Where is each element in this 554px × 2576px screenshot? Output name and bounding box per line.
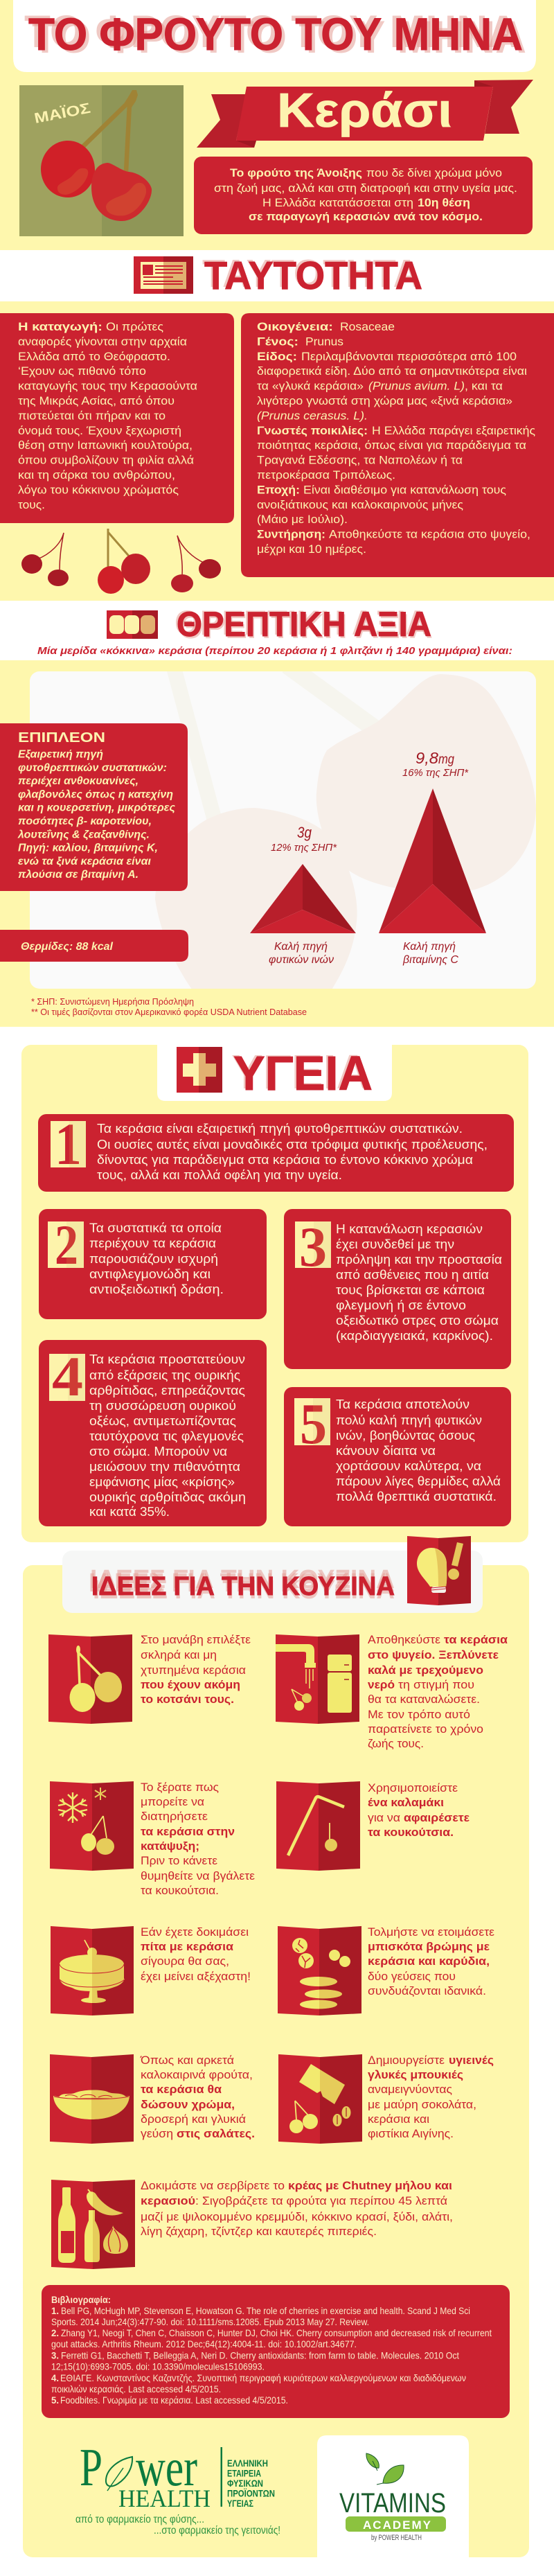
health card 5: ινών, βοηθώντας όσους: [336, 1429, 475, 1443]
icon: chocolate, cherries and pistachios: [278, 2054, 362, 2144]
tip 8: sweet bites: κεράσια και: [368, 2112, 429, 2126]
tip 4: pitting with a straw: για να: [368, 1811, 400, 1824]
tip 2: storing and washing: νερό: [368, 1678, 395, 1691]
chart: fibre triangle: 12% της ΣΗΠ*: [271, 843, 337, 854]
health card 4: Τα κεράσια προστατεύουν: [89, 1352, 245, 1366]
panel: origin text: Ελλάδα από το Θεόφραστο.: [18, 350, 170, 363]
panel: bibliography: Zhang Y1, Neogi T, Chen C, Chaisson C, Hunter DJ, Choi HK. Cherry consumption and decreased risk of recurrent: [61, 2327, 492, 2338]
chart: vitamin C triangle: βιταμίνης C: [402, 954, 458, 966]
tip 2: storing and washing: καλά με τρεχούμενο: [368, 1664, 483, 1677]
tip 7: salads: δώσουν χρώμα,: [141, 2098, 235, 2111]
health card 5: κάνουν δίαιτα να: [336, 1444, 436, 1458]
panel: additional nutrients: ΕΠΙΠΛΕΟΝ: [18, 730, 105, 746]
tip 7: salads: στις σαλάτες.: [177, 2127, 255, 2140]
panel: bibliography: 2.: [51, 2327, 59, 2338]
intro text box: Το φρούτο της Άνοιξης: [230, 166, 362, 179]
tip 8: sweet bites: υγιεινές: [449, 2054, 494, 2067]
tip 3: freezing: κατάψυξη;: [141, 1840, 199, 1853]
panel: botanical facts text: Γνωστές ποικιλίες:: [257, 424, 368, 437]
tip 8: sweet bites: Δημιουργείστε: [368, 2054, 445, 2067]
panel: origin text: όνομά τους. Έχουν ξεχωριστή: [18, 424, 181, 437]
icon: medical cross: [177, 1047, 222, 1093]
academy pill: [346, 2516, 446, 2532]
tip 9: chutney: κρέας με Chutney μήλου και: [288, 2179, 452, 2192]
company description: ΦΥΣΙΚΩΝ: [227, 2478, 263, 2489]
panel: origin text: αναφορές γίνονται στην αρχαία: [18, 335, 187, 348]
panel: calories: [0, 930, 188, 962]
health card 1: δίνοντας για παράδειγμα στα κεράσια το έντονο κόκκινο χρώμα: [97, 1153, 473, 1167]
health card 1: [38, 1111, 514, 1192]
icon: id card: [134, 256, 193, 294]
tip 7: salads: Όπως και αρκετά: [140, 2054, 234, 2067]
health card 3: [284, 1209, 511, 1369]
panel: calories: Θερμίδες: 88 kcal: [21, 941, 114, 953]
health card 5: χορτάσουν καλύτερα, να: [336, 1459, 481, 1473]
panel: botanical facts text: [241, 313, 554, 577]
tip 7: salads: γεύση: [141, 2127, 173, 2140]
panel: botanical facts text: διαφορετικά είδη. Δύο από τα σημαντικότερα είναι: [257, 364, 527, 378]
panel: origin text: λόγω του κόκκινου χρώματός: [18, 483, 179, 496]
academy pill: ACADEMY: [363, 2518, 431, 2532]
panel: additional nutrients: και η κουερσετίνη, μικρότερες: [18, 802, 176, 814]
panel: bibliography: Βιβλιογραφία:: [51, 2294, 111, 2305]
heading: health with icon: [177, 1045, 373, 1100]
panel: botanical facts text: τα «γλυκά κεράσια»: [257, 380, 364, 393]
health card 3: έχει συνδεθεί με την: [336, 1237, 454, 1251]
health card 5: πολλά θρεπτικά συστατικά.: [336, 1490, 497, 1503]
panel: additional nutrients: λουτεΐνης & ζεαξανθίνης.: [17, 829, 150, 840]
panel: bibliography: Bell PG, McHugh MP, Stevenson E, Howatson G. The role of cherries in exercise and health. Scand J Med Sci: [61, 2305, 470, 2316]
icon: bottles, onion and chili: [51, 2180, 135, 2269]
panel: bibliography: Ferretti G1, Bacchetti T, Belleggia A, Neri D. Cherry antioxidants: from farm to table. Molecules. 2010 Oct: [61, 2350, 459, 2361]
health card 4: τη συσσώρευση ουρικού: [89, 1399, 236, 1413]
tip 2: storing and washing: Αποθηκεύστε: [368, 1633, 440, 1646]
panel: bibliography: [42, 2285, 510, 2418]
tip 6: oat cookies: μπισκότα βρώμης με: [368, 1940, 490, 1953]
tip 9: chutney: [51, 2179, 453, 2269]
panel: bibliography: ΕΘΙΑΓΕ. Κωνσταντίνος Καζαντζής. Συνοπτική περιγραφή κυριότερων καλλιεργούμενων και διαδιδόμενων: [60, 2372, 466, 2383]
health card 4: οξέως, αντιμετωπίζοντας: [89, 1414, 236, 1428]
tip 2: storing and washing: θα τα καταναλώσετε.: [368, 1693, 480, 1706]
company description: ΕΤΑΙΡΕΙΑ: [227, 2468, 261, 2479]
value: fibre: 3g: [297, 824, 312, 841]
tip 3: freezing: διατηρήσετε: [141, 1810, 208, 1823]
health card 5: [284, 1387, 511, 1526]
tip 5: cherry pie: Εάν έχετε δοκιμάσει: [141, 1925, 249, 1939]
tip 6: oat cookies: συνδυάζονται ιδανικά.: [368, 1984, 486, 1997]
panel: botanical facts text: Είναι διαθέσιμο για κατανάλωση τους: [303, 483, 506, 496]
chart: fibre triangle: φυτικών ινών: [269, 954, 334, 966]
icon: light bulb with exclamation mark: [407, 1536, 471, 1605]
logo: Power Health: ...στο φαρμακείο της γειτονιάς!: [154, 2525, 280, 2537]
panel: origin text: καταγωγής τους την Κερασούντα: [18, 380, 197, 393]
panel: additional nutrients: ενώ τα ξινά κεράσια είναι: [18, 856, 151, 867]
background: nutrition yellow band: [0, 660, 554, 1027]
health card 3: τους βρίσκεται σε κάποια: [336, 1283, 485, 1297]
panel: origin text: πιστεύεται ότι πήραν και το: [18, 409, 166, 422]
fruit name: Κεράσι: [277, 83, 452, 137]
panel: bibliography: 3.: [51, 2350, 59, 2361]
logo: Power Health: από το φαρμακείο της φύσης...: [75, 2514, 204, 2525]
heading text: ΤΑΥΤΟΤΗΤΑ: [204, 254, 422, 298]
panel: botanical facts text: (Prunus cerasus. L).: [257, 409, 368, 422]
logo: Power Health: P: [80, 2437, 102, 2497]
health card 5: Τα κεράσια αποτελούν: [336, 1397, 470, 1411]
tip 2: storing and washing: στο ψυγείο. Ξεπλύνετε: [368, 1648, 499, 1661]
panel: botanical facts text: Συντήρηση:: [257, 528, 325, 541]
heading: nutritional value with icon: ΘΡΕΠΤΙΚΗ ΑΞΙΑ: [175, 603, 429, 642]
panel: origin text: τους.: [18, 498, 45, 511]
tip 5: cherry pie: πίτα με κεράσια: [141, 1940, 234, 1953]
panel: botanical facts text: Τραγανά Εδέσσης, τα Ναπολέων ή τα: [257, 454, 463, 467]
panel: botanical facts text: Γένος:: [257, 335, 298, 348]
panel: botanical facts text: Εποχή:: [257, 483, 300, 496]
logo: Vitamins Academy: VITAMINS: [339, 2488, 446, 2518]
panel: origin text: και τη σάρκα του ανθρώπου,: [18, 468, 175, 482]
heading: kitchen ideas: ΙΔΕΕΣ ΓΙΑ ΤΗΝ ΚΟΥΖΙΝΑ: [93, 1576, 395, 1605]
health card 3: (καρδιαγγειακά, καρκίνος).: [336, 1329, 493, 1343]
health card 3: από ασθένειες που η αιτία: [336, 1268, 489, 1282]
value: vitamin C: 9,8: [416, 749, 438, 767]
intro text box: [194, 157, 533, 234]
heading: nutritional value with icon: ΘΡΕΠΤΙΚΗ ΑΞΙΑ: [178, 607, 433, 646]
panel: health background: [21, 1045, 528, 1542]
tip 7: salads: τα κεράσια θα: [141, 2083, 222, 2096]
month label: ΜΑΪΟΣ: [33, 100, 91, 127]
intro text box: στη ζωή μας, αλλά και στη διατροφή και στην υγεία μας.: [214, 182, 517, 195]
tip 3: freezing: τα κουκούτσια.: [141, 1884, 219, 1897]
tip 6: oat cookies: κεράσια και καρύδια,: [368, 1955, 490, 1968]
number tile 1: 1: [55, 1111, 82, 1177]
panel: kitchen background: [23, 1565, 529, 2557]
company description: ΥΓΕΙΑΣ: [227, 2498, 253, 2509]
background: identity yellow band: [0, 301, 554, 601]
chart: fibre triangle: [250, 824, 356, 966]
ribbon with fruit name: [197, 80, 533, 148]
chart: fibre triangle: Καλή πηγή: [274, 941, 328, 953]
tip 1: choosing cherries: το κοτσάνι τους.: [141, 1693, 234, 1706]
health card 2: παρουσιάζουν ισχυρή: [89, 1252, 218, 1266]
logo: Power Health: HEALTH: [118, 2485, 211, 2512]
health card 4: μειώσουν την πιθανότητα: [89, 1460, 240, 1474]
tip 3: freezing: θυμηθείτε να βγάλετε: [141, 1869, 255, 1882]
health card 2: περιέχουν τα κεράσια: [89, 1237, 216, 1251]
value: vitamin C: mg: [438, 752, 454, 767]
panel: botanical facts text: ανοιξιάτικους και καλοκαιρινούς μήνες: [257, 498, 463, 511]
panel: bibliography: Foodbites. Γνωριμία με τα κεράσια. Last accessed 4/5/2015.: [60, 2394, 288, 2406]
tip 8: sweet bites: αναμειγνύοντας: [368, 2083, 452, 2096]
panel: botanical facts text: Είδος:: [257, 350, 297, 363]
panel: origin text: Η καταγωγή:: [18, 320, 102, 333]
health card 3: οξειδωτικό στρες στο σώμα: [336, 1314, 499, 1327]
tip 2: storing and washing: τη στιγμή που: [398, 1678, 474, 1691]
number tile 3: 3: [299, 1215, 327, 1278]
heading: identity with icon: ΤΑΥΤΟΤΗΤΑ: [202, 252, 420, 296]
panel: bibliography: 5.: [51, 2394, 59, 2406]
panel: botanical facts text: , και τα: [465, 380, 503, 393]
tip 2: storing and washing: παρατείνετε το χρόνο: [368, 1722, 483, 1736]
health card 1: Τα κεράσια είναι εξαιρετική πηγή φυτοθρεπτικών συστατικών.: [97, 1122, 463, 1136]
health card 4: αρθρίτιδας, επηρεάζοντας: [89, 1384, 245, 1397]
panel: botanical facts text: ποιότητας κεράσια, όπως είναι για παράδειγμα τα: [257, 439, 526, 452]
panel: bibliography: ποικιλιών κερασιάς. Last accessed 4/5/2015.: [51, 2383, 221, 2394]
tip 1: choosing cherries: [48, 1633, 251, 1724]
tip 1: choosing cherries: σκληρά και μη: [141, 1648, 217, 1661]
tip 4: pitting with a straw: Χρησιμοποιείστε: [368, 1781, 458, 1794]
health card 2: αντιοξειδωτική δράση.: [89, 1282, 224, 1296]
health card 5: πάρουν λίγες θερμίδες αλλά: [336, 1474, 501, 1488]
tip 3: freezing: μπορείτε να: [141, 1795, 204, 1808]
tip 3: freezing: Το ξέρατε πως: [141, 1781, 219, 1794]
tip 5: cherry pie: [51, 1925, 251, 2015]
panel: origin text: [0, 313, 234, 523]
chart: vitamin C triangle: 16% της ΣΗΠ*: [402, 768, 469, 779]
panel: additional nutrients: Πηγή: καλίου, βιταμίνης Κ,: [18, 843, 158, 854]
icon: tap and fridge: [276, 1634, 359, 1724]
panel: additional nutrients: [0, 723, 188, 891]
health card 2: Τα συστατικά τα οποία: [89, 1221, 222, 1235]
health card 4: από εξάρσεις της ουρικής: [89, 1368, 240, 1382]
heading: kitchen ideas: [62, 1551, 483, 1613]
tip 7: salads: [50, 2054, 255, 2144]
chart: vitamin C triangle: [379, 749, 486, 966]
tip 8: sweet bites: [278, 2054, 494, 2144]
panel: botanical facts text: Prunus: [305, 335, 343, 348]
footnotes: * ΣΗΠ: Συνιστώμενη Ημερήσια Πρόσληψη: [31, 997, 194, 1007]
heading text: ΘΡΕΠΤΙΚΗ ΑΞΙΑ: [177, 605, 431, 644]
tip 3: freezing: τα κεράσια στην: [141, 1825, 235, 1838]
health card 4: εμφάνισης μίας «κρίσης»: [89, 1475, 235, 1489]
tip 9: chutney: Δοκιμάστε να σερβίρετε το: [141, 2179, 285, 2192]
panel: additional nutrients: περιέχει ανθοκυανίνες,: [18, 775, 138, 787]
background: top yellow band: [0, 0, 554, 250]
health card 4: ταυτόχρονα τις φλεγμονές: [89, 1429, 244, 1443]
panel: additional nutrients: φλαβονόλες όπως η κατεχίνη: [18, 788, 173, 800]
health card 1: Οι ουσίες αυτές είναι μοναδικές στα τρόφιμα φυτικής προέλευσης,: [97, 1138, 488, 1152]
icon: open book: [107, 610, 158, 639]
icon: cherries: [48, 1634, 132, 1724]
icon: straw and cherry: [276, 1781, 360, 1871]
panel: botanical facts text: Περιλαμβάνονται περισσότερα από 100: [301, 350, 517, 363]
health card 3: πρόληψη και την προστασία: [336, 1253, 502, 1267]
panel: bibliography: gout attacks. Arthritis Rheum. 2012 Dec;64(12):4004-11. doi: 10.1002/art.34677.: [51, 2338, 357, 2349]
tip 4: pitting with a straw: ένα καλαμάκι: [368, 1796, 444, 1809]
panel: botanical facts text: (Prunus avium. L): [368, 380, 465, 393]
tip 7: salads: δροσερή και γλυκιά: [141, 2112, 246, 2126]
icon: salad bowl: [50, 2054, 134, 2144]
tip 8: sweet bites: γλυκές μπουκιές: [368, 2068, 463, 2081]
heading: health with icon: ΥΓΕΙΑ: [231, 1045, 370, 1099]
panel: additional nutrients: ποσότητες β- καροτενίου,: [18, 815, 152, 827]
heading: kitchen ideas: ΙΔΕΕΣ ΓΙΑ ΤΗΝ ΚΟΥΖΙΝΑ: [90, 1565, 395, 1594]
icon: leaves: [366, 2453, 404, 2485]
tip 1: choosing cherries: που έχουν ακόμη: [141, 1678, 240, 1691]
intro text box: Η Ελλάδα κατατάσσεται στη: [262, 196, 413, 209]
tip 6: oat cookies: [278, 1925, 494, 2015]
tip 4: pitting with a straw: τα κουκούτσια.: [368, 1826, 454, 1839]
tip 1: choosing cherries: χτυπημένα κεράσια: [141, 1664, 246, 1677]
panel: bibliography: Sports. 2014 Jun;24(3):477-90. doi: 10.1111/sms.12085. Epub 2013 May 27. Review.: [51, 2316, 369, 2327]
panel: origin text: της Μικράς Ασίας, από όπου: [18, 394, 175, 407]
icon: cake on stand: [51, 1926, 134, 2015]
panel: additional nutrients: Εξαιρετική πηγή: [18, 748, 103, 761]
logo: Power Health: [75, 2437, 280, 2537]
panel: month card with cherries: [19, 85, 184, 236]
left cherry: [41, 141, 95, 197]
health card 4: στο σώμα. Μπορούν να: [89, 1445, 227, 1458]
panel: origin text: θέση στην Ιαπωνική κουλτούρα,: [18, 439, 193, 452]
company description: ΕΛΛΗΝΙΚΗ: [227, 2458, 268, 2469]
company description: [227, 2458, 275, 2509]
tip 2: storing and washing: ζωής τους.: [368, 1737, 424, 1750]
tip 5: cherry pie: σίγουρα θα σας,: [141, 1955, 229, 1968]
tip 6: oat cookies: δύο γεύσεις που: [368, 1970, 456, 1983]
intro text box: 10η θέση: [418, 196, 470, 209]
number tile 5: 5: [300, 1392, 327, 1456]
tip 9: chutney: κερασιού: [141, 2194, 195, 2207]
heading text: ΙΔΕΕΣ ΓΙΑ ΤΗΝ ΚΟΥΖΙΝΑ: [91, 1572, 395, 1601]
tip 1: choosing cherries: Στο μανάβη επιλέξτε: [141, 1633, 251, 1646]
tip 8: sweet bites: φιστίκια Αιγίνης.: [368, 2127, 454, 2140]
health card 2: αντιφλεγμονώδη και: [89, 1267, 211, 1281]
panel: bibliography: 4.: [51, 2372, 59, 2383]
panel: botanical facts text: πετροκέρασα Τριπόλεως.: [257, 468, 395, 482]
health card 3: φλεγμονή ή σε έντονο: [336, 1298, 466, 1312]
panel: origin text: όπου συμβολίζουν τη φιλία αλλά: [18, 454, 194, 467]
panel: origin text: Οι πρώτες: [106, 320, 163, 333]
tip 9: chutney: μαζί με ψιλοκομμένο κρεμμύδι, κόκκινο κρασί, ξύδι, αλάτι,: [141, 2210, 453, 2223]
panel: botanical facts text: λιγότερο γνωστά στη χώρα μας «ξινά κεράσια»: [257, 394, 512, 407]
title panel: ΤΟ ΦΡΟΥΤΟ ΤΟΥ ΜΗΝΑ: [32, 11, 526, 62]
tip 9: chutney: : Σιγοβράζετε τα φρούτα για περίπου 45 λεπτά: [195, 2194, 447, 2207]
heading: kitchen ideas: ΙΔΕΕΣ ΓΙΑ ΤΗΝ ΚΟΥΖΙΝΑ: [89, 1569, 395, 1598]
panel: botanical facts text: Αποθηκεύστε τα κεράσια στο ψυγείο,: [329, 528, 530, 541]
icon: leaf in place of the letter o: [106, 2457, 132, 2491]
panel: nutrition chart background: [30, 665, 536, 998]
panel: botanical facts text: Η Ελλάδα παράγει εξαιρετικής: [372, 424, 535, 437]
panel: botanical facts text: (Μάιο με Ιούλιο).: [257, 513, 348, 526]
panel: origin text: ‘Εχουν ως πιθανό τόπο: [18, 364, 146, 378]
title text: ΤΟ ΦΡΟΥΤΟ ΤΟΥ ΜΗΝΑ: [28, 8, 523, 60]
tip 9: chutney: λίγη ζάχαρη, τζίντζερ και καυτερές πιπεριές.: [141, 2225, 377, 2238]
tip 4: pitting with a straw: αφαιρέσετε: [404, 1811, 470, 1824]
tip 6: oat cookies: Τολμήστε να ετοιμάσετε: [368, 1925, 494, 1939]
health card 4: [39, 1340, 267, 1526]
footnotes: ** Οι τιμές βασίζονται στον Αμερικανικό φορέα USDA Nutrient Database: [31, 1007, 307, 1017]
health card 4: ουρικής αρθρίτιδας ακόμη: [89, 1490, 246, 1504]
cherry stems: [75, 104, 129, 172]
tip 8: sweet bites: με μαύρη σοκολάτα,: [368, 2098, 476, 2111]
panel: botanical facts text: μέχρι και 10 ημέρες.: [257, 542, 366, 556]
right cherry: [91, 163, 152, 221]
logo: Power Health: wer: [136, 2437, 197, 2497]
health card 5: πολύ καλή πηγή φυτικών: [336, 1413, 482, 1427]
tip 2: storing and washing: [276, 1633, 508, 1750]
company description: ΠΡΟΪΟΝΤΩΝ: [227, 2487, 275, 2498]
panel: botanical facts text: Οικογένεια:: [257, 320, 333, 333]
title panel: ΤΟ ΦΡΟΥΤΟ ΤΟΥ ΜΗΝΑ: [24, 6, 519, 57]
title panel: [13, 0, 536, 72]
panel: botanical facts text: Rosaceae: [340, 320, 395, 333]
health card 4: και κατά 35%.: [89, 1505, 170, 1519]
number tile 4: 4: [52, 1345, 83, 1408]
panel: bibliography: 1.: [51, 2305, 59, 2316]
health card 2: [39, 1209, 267, 1319]
subtitle: serving size: Μία μερίδα «κόκκινα» κεράσια (περίπου 20 κεράσια ή 1 φλιτζάνι ή 140 γραμμάρια) είναι:: [37, 645, 512, 657]
intro text box: που δε δίνει χρώμα μόνο: [366, 166, 502, 179]
tip 2: storing and washing: Με τον τρόπο αυτό: [368, 1708, 470, 1721]
tip 3: freezing: [50, 1781, 255, 1897]
intro text box: σε παραγωγή κερασιών ανά τον κόσμο.: [249, 210, 483, 223]
tip 2: storing and washing: τα κεράσια: [444, 1633, 508, 1646]
panel: additional nutrients: φυτοθρεπτικών συστατικών:: [18, 762, 167, 774]
health card 3: Η κατανάλωση κερασιών: [336, 1222, 483, 1236]
number tile 2: 2: [55, 1213, 78, 1276]
logo: Vitamins Academy: [317, 2435, 469, 2557]
heading text: ΥΓΕΙΑ: [233, 1046, 373, 1100]
tip 7: salads: καλοκαιρινά φρούτα,: [141, 2068, 253, 2081]
icon: three small cherry pairs: [21, 529, 221, 594]
icon: walnuts, cherries and cookies: [278, 1926, 361, 2015]
chart: vitamin C triangle: Καλή πηγή: [403, 941, 456, 953]
tip 4: pitting with a straw: [276, 1781, 470, 1871]
footnotes: [31, 997, 307, 1017]
panel: additional nutrients: πλούσια σε βιταμίνη Α.: [18, 869, 138, 881]
icon: snowflakes and cherries: [50, 1781, 134, 1871]
tip 5: cherry pie: έχει μείνει αξέχαστη!: [141, 1970, 251, 1983]
tip 3: freezing: Πριν το κάνετε: [141, 1854, 217, 1867]
health card 1: τους, αλλά και πολλά οφέλη για την υγεία.: [97, 1168, 342, 1182]
panel: bibliography: 12;15(10):6993-7005. doi: 10.3390/molecules15106993.: [51, 2361, 265, 2372]
logo: Vitamins Academy: by POWER HEALTH: [371, 2534, 422, 2542]
